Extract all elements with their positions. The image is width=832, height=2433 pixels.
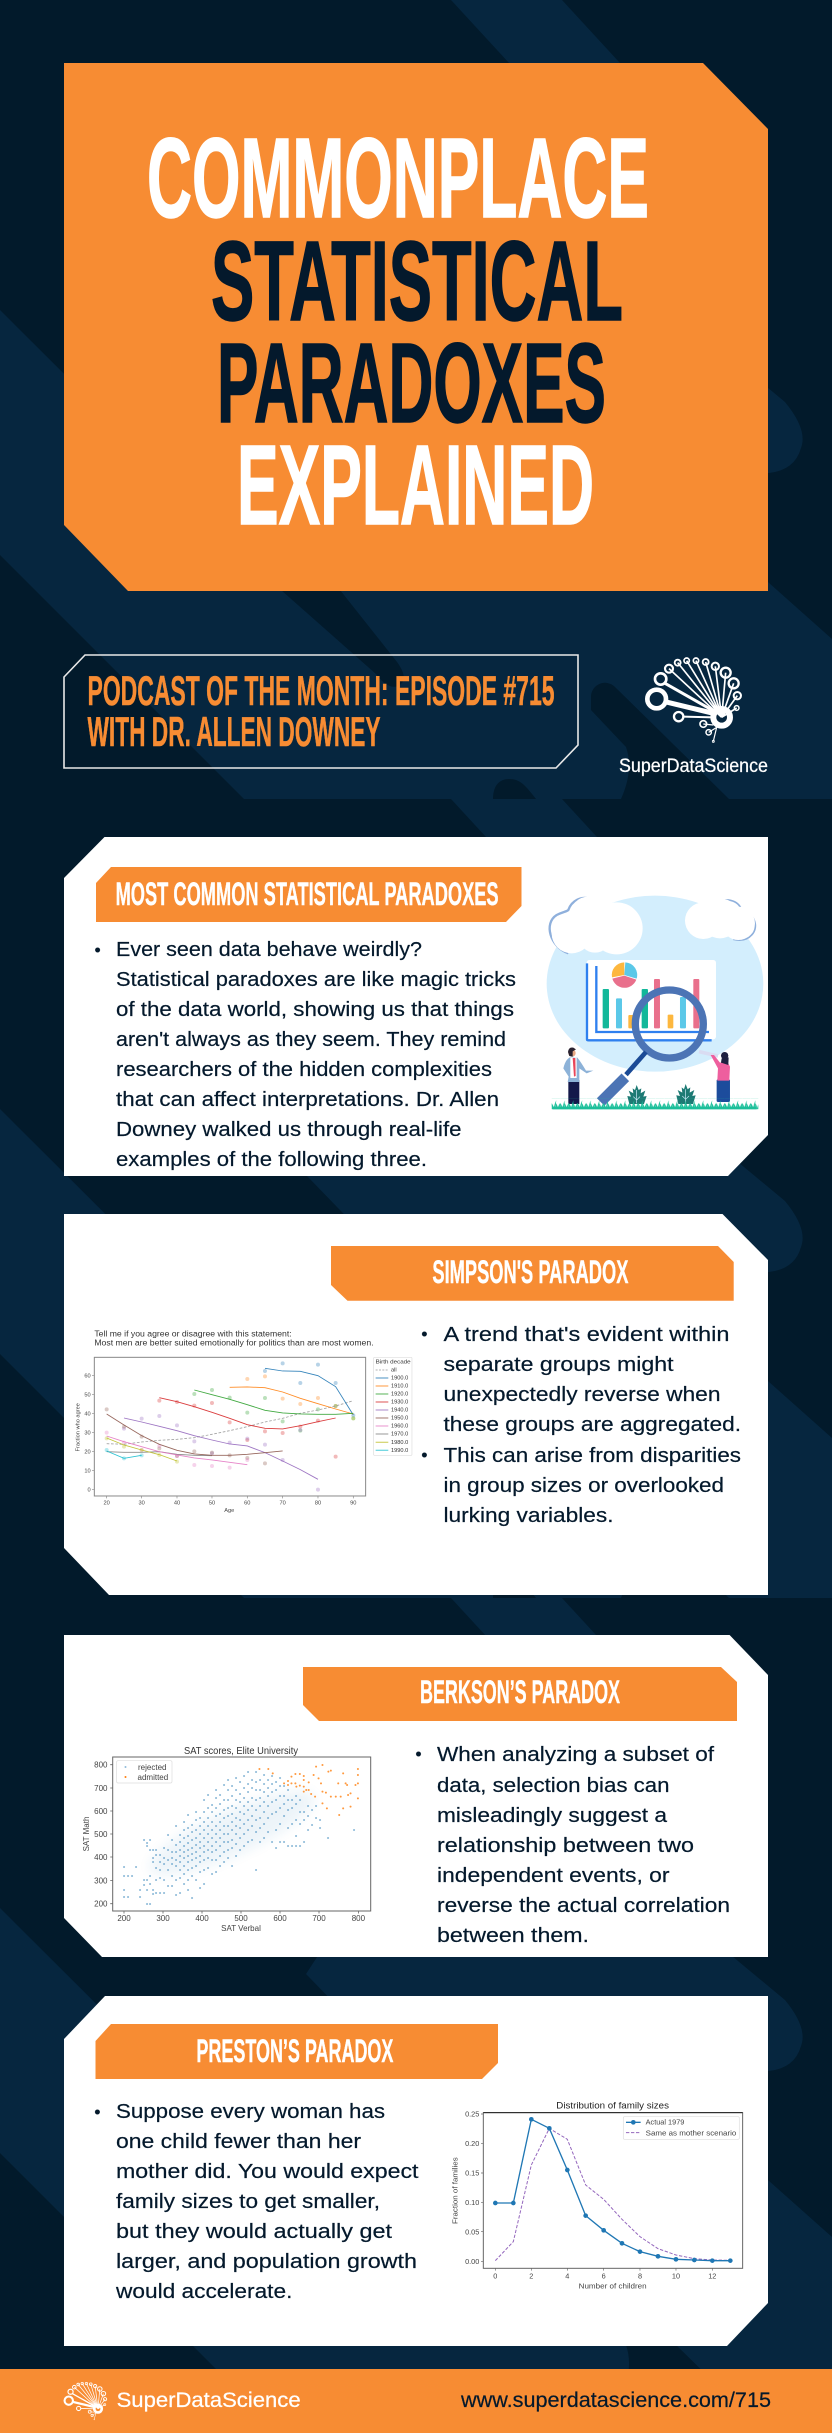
trend lines	[107, 1368, 353, 1479]
text block: Downey walked us through real-life	[116, 1119, 462, 1141]
legend	[117, 1761, 172, 1783]
text block: in group sizes or overlooked	[444, 1475, 724, 1497]
podcast episode box	[64, 655, 578, 768]
text block	[95, 2101, 419, 2303]
legend: admitted	[138, 1773, 168, 1782]
scatter chart: SAT scores, Elite University: 700	[312, 1914, 326, 1923]
line chart: distribution of family sizes: Number of children	[579, 2282, 647, 2291]
bars	[603, 979, 699, 1028]
legend: all	[391, 1368, 397, 1374]
line chart: fraction who agree by age and birth decade: Tell me if you agree or disagree with this statement:	[94, 1330, 292, 1339]
scatter chart: SAT scores, Elite University: 500	[94, 1830, 108, 1839]
line chart: distribution of family sizes: 2	[529, 2271, 533, 2280]
text block: examples of the following three.	[116, 1149, 427, 1171]
logo: SuperDataScience: SuperDataScience	[619, 756, 768, 777]
legend: 1960.0	[391, 1424, 408, 1430]
line chart: distribution of family sizes: 4	[565, 2271, 569, 2280]
scatter chart: SAT scores, Elite University: 300	[156, 1914, 170, 1923]
woman	[699, 1052, 730, 1102]
panel: most common statistical paradoxes	[64, 837, 768, 1176]
text block: of the data world, showing us that things	[116, 999, 514, 1021]
line chart: fraction who agree by age and birth decade: 80	[315, 1500, 321, 1506]
legend: 1900.0	[391, 1376, 408, 1382]
text block: one child fewer than her	[116, 2131, 361, 2153]
line chart: distribution of family sizes	[451, 2101, 743, 2291]
line chart: fraction who agree by age and birth decade: 20	[104, 1500, 110, 1506]
footer logo	[65, 2382, 301, 2420]
scatter chart: SAT scores, Elite University: 800	[352, 1914, 366, 1923]
scatter chart: SAT scores, Elite University: 200	[94, 1900, 108, 1908]
scatter chart: SAT scores, Elite University: SAT scores, Elite University	[184, 1746, 298, 1757]
text block	[95, 939, 516, 1171]
text block: Suppose every woman has	[116, 2101, 385, 2123]
line chart: fraction who agree by age and birth decade: 70	[279, 1500, 286, 1506]
line chart: fraction who agree by age and birth decade: 60	[84, 1374, 91, 1380]
line chart: distribution of family sizes: 12	[708, 2271, 716, 2280]
scatter chart: SAT scores, Elite University: SAT Math	[82, 1817, 91, 1851]
scatter chart: SAT scores, Elite University: 400	[94, 1853, 108, 1862]
scatter chart: SAT scores, Elite University: 200	[117, 1914, 131, 1923]
line chart: fraction who agree by age and birth decade: Most men are better suited emotionally for politics than are most women.	[94, 1338, 374, 1347]
text block: This can arise from disparities	[444, 1445, 741, 1467]
heading	[331, 1246, 734, 1301]
line chart: fraction who agree by age and birth decade: 30	[84, 1431, 91, 1437]
text block: reverse the actual correlation	[437, 1895, 730, 1917]
line chart: fraction who agree by age and birth decade	[75, 1330, 412, 1514]
text block: family sizes to get smaller,	[116, 2191, 380, 2213]
line chart: distribution of family sizes: 8	[638, 2271, 642, 2280]
scatter chart: SAT scores, Elite University: 600	[273, 1914, 287, 1923]
text block: separate groups might	[444, 1354, 674, 1376]
legend: Actual 1979	[646, 2118, 684, 2127]
line chart: fraction who agree by age and birth decade: 50	[209, 1500, 215, 1506]
line chart: distribution of family sizes: 0.25	[465, 2110, 479, 2119]
legend	[374, 1357, 412, 1455]
footer logo: SuperDataScience	[117, 2389, 301, 2412]
line chart: fraction who agree by age and birth decade: Age	[224, 1508, 234, 1514]
hero title panel	[64, 63, 768, 591]
heading	[96, 867, 522, 922]
text block: would accelerate.	[115, 2281, 292, 2303]
line chart: distribution of family sizes: 0	[493, 2271, 497, 2280]
legend: 1930.0	[391, 1400, 408, 1406]
scatter chart: SAT scores, Elite University	[82, 1746, 371, 1933]
line chart: distribution of family sizes: 0.15	[465, 2169, 479, 2178]
text block: Statistical paradoxes are like magic tricks	[116, 969, 516, 991]
scatter chart: SAT scores, Elite University: 500	[234, 1914, 248, 1923]
line chart: distribution of family sizes: 0.05	[465, 2227, 479, 2236]
text block: unexpectedly reverse when	[444, 1384, 720, 1406]
line chart: fraction who agree by age and birth decade: Fraction who agree	[75, 1403, 81, 1452]
line chart: fraction who agree by age and birth decade: 60	[244, 1500, 250, 1506]
line chart: fraction who agree by age and birth decade: 0	[88, 1488, 91, 1494]
logo: SuperDataScience	[619, 658, 768, 777]
line chart: distribution of family sizes: 0.20	[465, 2139, 479, 2148]
plants	[627, 1084, 696, 1104]
magnifying glass	[601, 990, 703, 1102]
text block: mother did. You would expect	[116, 2161, 419, 2183]
scatter chart: SAT scores, Elite University: 400	[195, 1914, 209, 1923]
line chart: fraction who agree by age and birth decade: 40	[84, 1412, 91, 1418]
text block: relationship between two	[437, 1835, 694, 1857]
line chart: fraction who agree by age and birth decade: 50	[84, 1393, 91, 1399]
line chart: fraction who agree by age and birth decade: 10	[84, 1469, 91, 1475]
line chart: distribution of family sizes: 0.10	[465, 2198, 479, 2207]
legend: 1990.0	[391, 1448, 408, 1454]
line chart: distribution of family sizes: Fraction of families	[451, 2157, 460, 2224]
footer bar	[0, 2369, 832, 2433]
legend: 1920.0	[391, 1392, 408, 1398]
website url: www.superdatascience.com/715	[460, 2389, 771, 2412]
legend: 1980.0	[391, 1440, 408, 1446]
text block: but they would actually get	[116, 2221, 393, 2243]
panel: Simpson's paradox	[64, 1214, 768, 1595]
legend: 1910.0	[391, 1384, 408, 1390]
heading	[303, 1667, 737, 1721]
illustration: analysts with magnifier and bar chart	[547, 896, 763, 1109]
title	[147, 115, 649, 548]
line chart: distribution of family sizes: 6	[602, 2271, 606, 2280]
heading: SIMPSON'S PARADOX	[432, 1254, 629, 1290]
panel: Preston's paradox	[64, 1996, 768, 2346]
line chart: fraction who agree by age and birth decade: 20	[84, 1450, 91, 1456]
legend: 1940.0	[391, 1408, 408, 1414]
text block	[416, 1744, 730, 1947]
text block: larger, and population growth	[116, 2251, 417, 2273]
legend: rejected	[138, 1763, 166, 1772]
pie chart	[612, 962, 637, 988]
text block: between them.	[437, 1925, 589, 1947]
scatter chart: SAT scores, Elite University: 800	[94, 1760, 108, 1770]
text block: A trend that's evident within	[444, 1324, 730, 1346]
panel: Berkson's paradox	[64, 1635, 768, 1957]
line chart: fraction who agree by age and birth decade: 40	[174, 1500, 180, 1506]
heading: PRESTON’S PARADOX	[196, 2033, 394, 2069]
heading	[96, 2024, 498, 2079]
text block: When analyzing a subset of	[437, 1744, 714, 1766]
scatter points	[105, 1361, 355, 1492]
text block: that can affect interpretations. Dr. Allen	[116, 1089, 499, 1111]
text block: Ever seen data behave weirdly?	[116, 939, 422, 961]
text block: lurking variables.	[444, 1505, 614, 1527]
legend: Same as mother scenario	[646, 2128, 736, 2137]
legend: 1950.0	[391, 1416, 408, 1422]
text block: independent events, or	[437, 1865, 670, 1887]
legend	[623, 2117, 739, 2139]
scatter chart: SAT scores, Elite University: 300	[94, 1876, 108, 1886]
text block: researchers of the hidden complexities	[116, 1059, 492, 1081]
scatter chart: SAT scores, Elite University: 600	[94, 1807, 108, 1816]
legend: 1970.0	[391, 1432, 408, 1438]
podcast episode box: WITH DR. ALLEN DOWNEY	[88, 708, 380, 755]
line chart: distribution of family sizes: 0.00	[465, 2257, 479, 2266]
scatter chart: SAT scores, Elite University: 700	[94, 1784, 108, 1793]
grass	[552, 1098, 758, 1109]
scatter chart: SAT scores, Elite University: SAT Verbal	[221, 1924, 261, 1933]
heading: BERKSON’S PARADOX	[420, 1674, 620, 1710]
heading: MOST COMMON STATISTICAL PARADOXES	[116, 876, 499, 912]
legend: Birth decade	[376, 1359, 411, 1365]
man	[563, 1047, 593, 1104]
line chart: distribution of family sizes: Distribution of family sizes	[556, 2101, 670, 2111]
text block	[422, 1324, 741, 1527]
text block: these groups are aggregated.	[444, 1414, 741, 1436]
line chart: fraction who agree by age and birth decade: 30	[139, 1500, 145, 1506]
text block: aren't always as they seem. They remind	[116, 1029, 506, 1051]
text block: misleadingly suggest a	[437, 1805, 668, 1827]
line chart: fraction who agree by age and birth decade: 90	[350, 1500, 356, 1506]
line chart: distribution of family sizes: 10	[672, 2271, 680, 2280]
text block: data, selection bias can	[437, 1775, 670, 1797]
